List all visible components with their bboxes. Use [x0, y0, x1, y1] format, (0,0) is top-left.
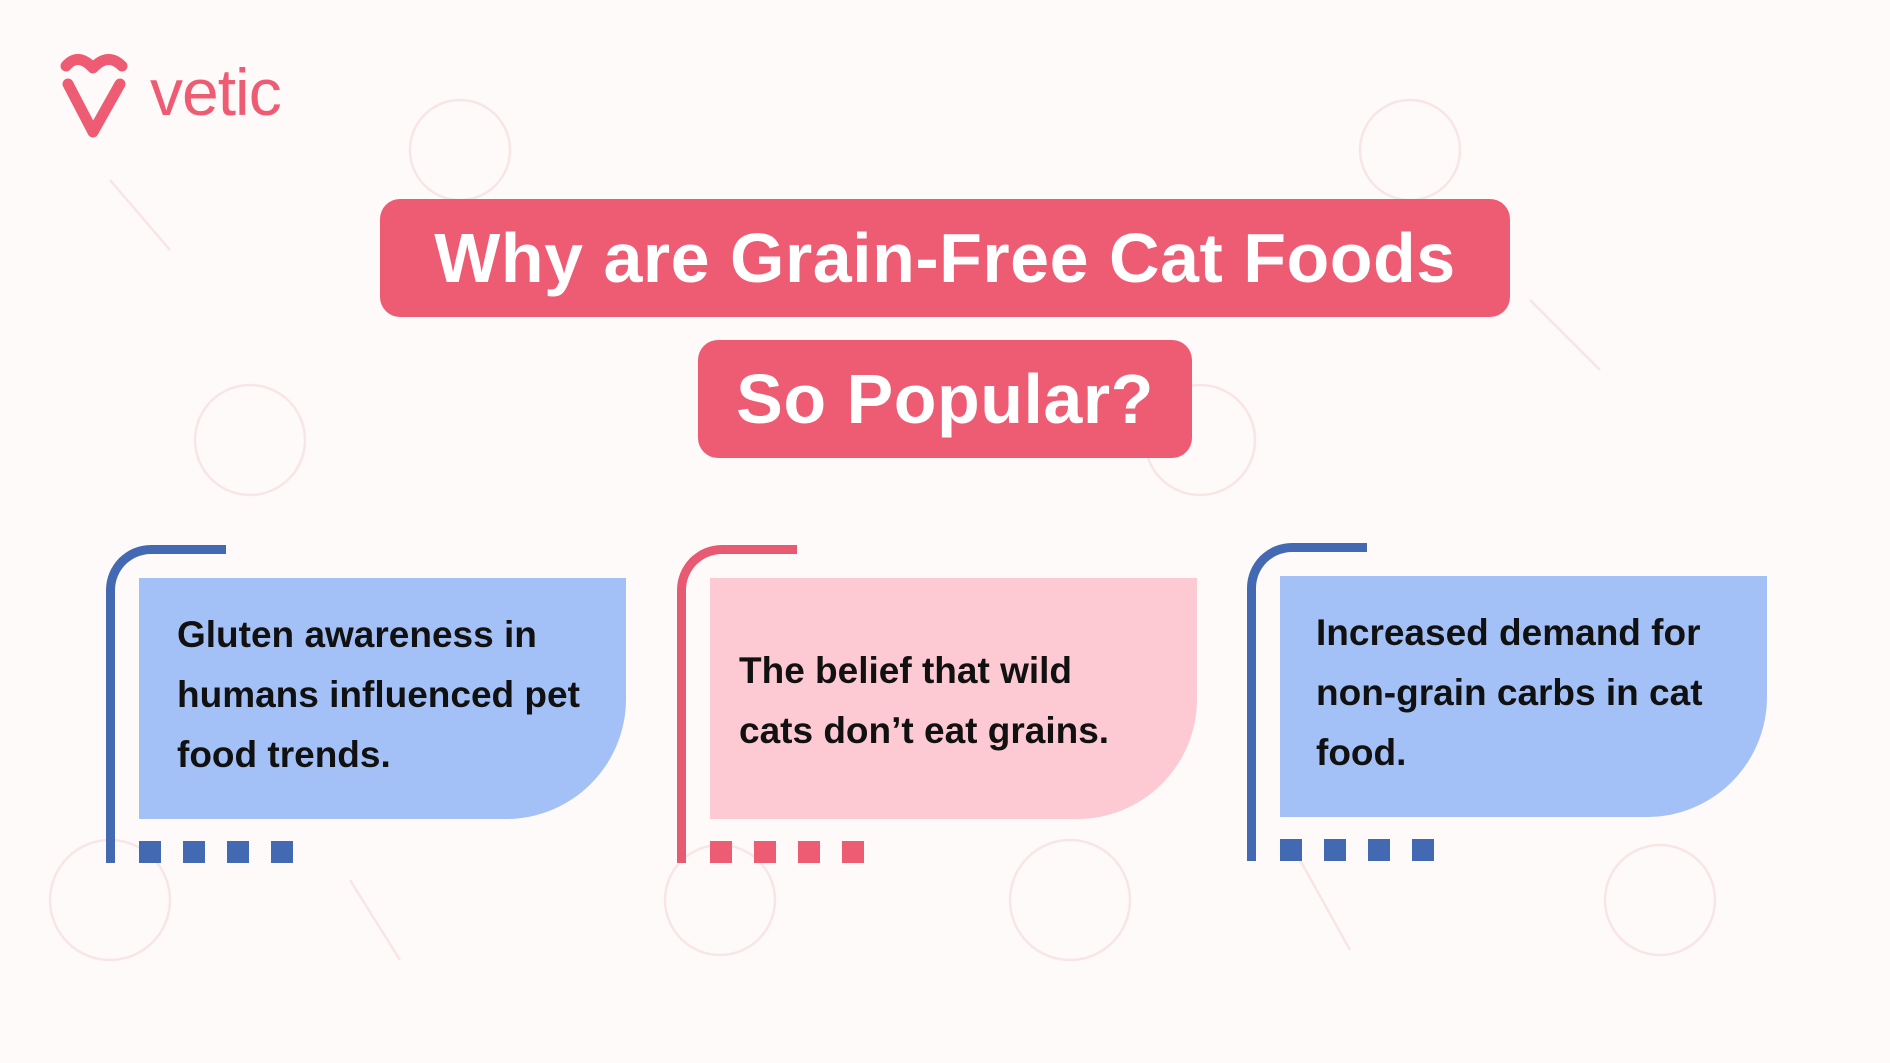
text: demand: non-grain carbs in cat — [1316, 672, 1703, 713]
text: wild cats: cats don’t eat grains. — [739, 710, 1109, 751]
panel: card 3 — [1247, 543, 1767, 861]
text: gluten awareness: food trends. — [177, 734, 391, 775]
title line 2: So Popular? — [736, 360, 1154, 438]
title line 2 — [698, 340, 1192, 458]
text: wild cats — [710, 578, 1197, 819]
text: wild cats: The belief that wild — [739, 650, 1072, 691]
logo text: vetic — [150, 55, 281, 129]
title line 1 — [380, 199, 1510, 317]
text: gluten awareness: Gluten awareness in — [177, 614, 537, 655]
text: gluten awareness: humans influenced pet — [177, 674, 580, 715]
text: gluten awareness — [139, 578, 626, 819]
title line 1: Why are Grain-Free Cat Foods — [434, 219, 1456, 297]
logo — [60, 54, 281, 138]
panel: card 2 — [677, 545, 1197, 863]
icon: heart V — [60, 54, 128, 138]
text: demand: Increased demand for — [1316, 612, 1701, 653]
text: demand — [1280, 576, 1767, 817]
panel: card 1 — [106, 545, 626, 863]
text: demand: food. — [1316, 732, 1406, 773]
